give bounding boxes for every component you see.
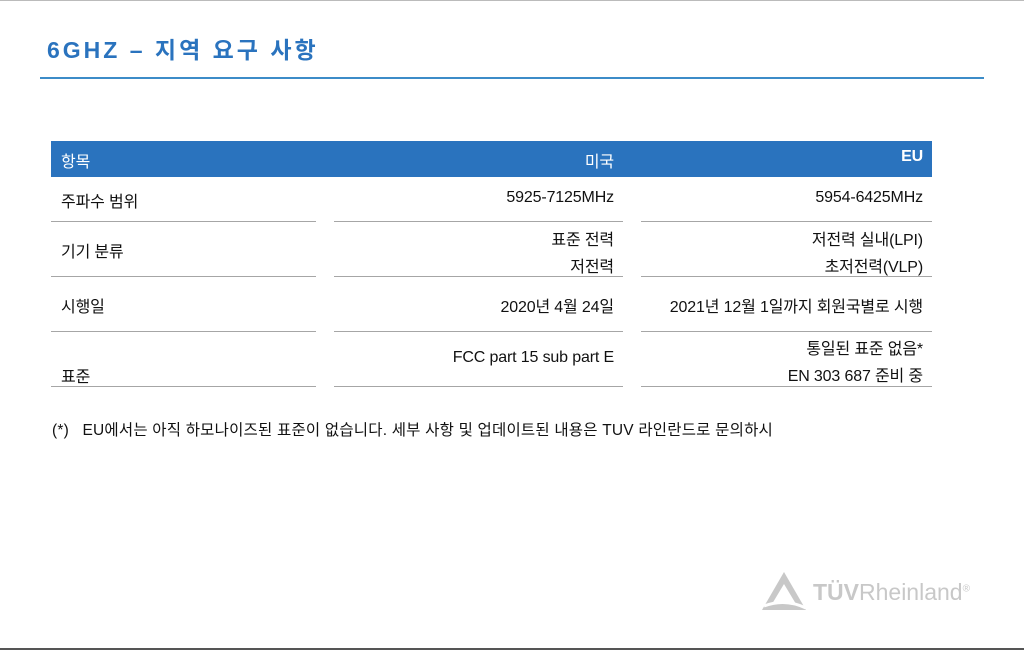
row: frequency: 5954-6425MHz	[815, 189, 923, 206]
row: effective date: 2021년 12월 1일까지 회원국별로 시행	[670, 299, 923, 316]
row: effective date: 시행일	[61, 299, 105, 316]
table header: 항목	[61, 154, 90, 171]
row: frequency: 주파수 범위	[61, 194, 138, 211]
logo: TUV Rheinland	[762, 572, 970, 610]
row: standard: EN 303 687 준비 중	[788, 368, 923, 385]
footnote: (*) EU에서는 아직 하모나이즈된 표준이 없습니다. 세부 사항 및 업데이트된 내용은 TUV 라인란드로 문의하시	[52, 422, 773, 439]
table	[51, 141, 932, 387]
row: frequency	[61, 189, 923, 211]
table header: EU	[901, 148, 923, 165]
row: frequency: 5925-7125MHz	[506, 189, 614, 206]
row: standard: FCC part 15 sub part E	[453, 349, 614, 366]
icon: triangle	[762, 572, 806, 610]
row: standard: 표준	[61, 369, 90, 386]
logo: TUV Rheinland: TÜVRheinland®	[813, 579, 970, 605]
row: standard	[61, 340, 923, 386]
row: device class: 저전력	[570, 259, 614, 276]
row: device class: 기기 분류	[61, 244, 124, 261]
row: device class: 초저전력(VLP)	[825, 259, 923, 276]
row: device class	[61, 232, 923, 276]
table header	[51, 141, 932, 177]
title: 6GHZ – 지역 요구 사항	[47, 37, 319, 63]
row: effective date: 2020년 4월 24일	[500, 299, 614, 316]
table header: 미국	[585, 154, 614, 171]
row: device class: 저전력 실내(LPI)	[812, 232, 923, 249]
row: standard: 통일된 표준 없음*	[806, 341, 923, 358]
row: device class: 표준 전력	[551, 232, 614, 249]
row: effective date	[61, 298, 923, 316]
